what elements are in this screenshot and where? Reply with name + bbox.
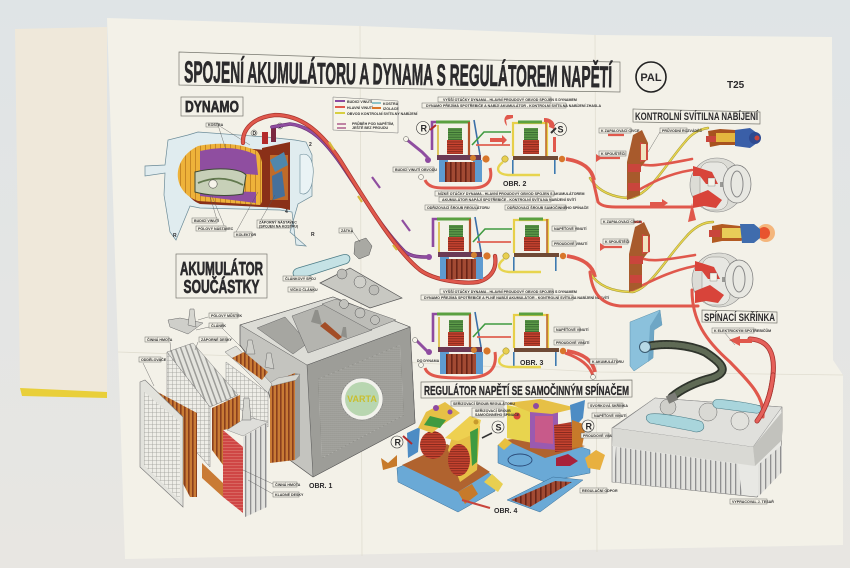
label: to electrical appliances: K ELEKTRICKÝM SPOTŘEBIČŮM <box>714 328 771 333</box>
dynamo callouts: (SPOJEN NA KOSTRU) <box>259 224 299 228</box>
heading: battery components: AKUMULÁTOR <box>180 258 263 279</box>
heading: dynamo: DYNAMO <box>185 99 239 116</box>
figure 2 regulator: BUDICÍ VINUTÍ OBVODU <box>395 167 437 172</box>
plate labels: KLADNÉ DESKY <box>275 492 304 497</box>
dynamo callouts: KOLEKTOR <box>236 233 257 237</box>
figure 4 regulator right: R <box>586 422 592 432</box>
figure 4 labels: SEŘIZOVACÍ ŠROUB REGULÁTORU <box>453 401 515 406</box>
figure 2 regulator: R <box>420 124 428 134</box>
figure 4 regulator right <box>482 399 605 482</box>
dynamo callouts: KOSTRA <box>208 123 224 127</box>
figure 4 caption: OBR. 4 <box>494 508 517 515</box>
upper lamp labels <box>599 128 703 156</box>
legend: HLAVNÍ VINUTÍ <box>347 105 374 110</box>
dynamo callouts: ZÁPORNÝ NÁSTAVEC <box>259 220 297 224</box>
car battery <box>612 398 782 497</box>
legend: BUDICÍ VINUTÍ <box>347 99 373 104</box>
lower ignition switch <box>692 253 753 307</box>
upper charging lamp <box>706 128 761 148</box>
plate labels: ČLÁNEK <box>211 323 226 328</box>
dynamo callouts <box>173 123 315 239</box>
figure 3 regulator: PROUDOVÉ VINUTÍ <box>556 340 590 345</box>
title <box>179 52 620 94</box>
figure 3 regulator: NAPĚŤOVÉ VINUTÍ <box>556 327 590 332</box>
lit charging lamp <box>709 224 775 243</box>
middle regulator <box>425 191 595 279</box>
lid labels <box>283 228 360 292</box>
heading: switch box <box>702 310 777 324</box>
braided earth cable <box>640 342 722 404</box>
upper lamp labels: K SPOUŠTĚČI <box>601 151 625 156</box>
legend: IZOLACE <box>383 107 399 111</box>
figure 4 labels: REGULAČNÍ ODPOR <box>582 488 618 493</box>
battery plates exploded <box>140 309 300 517</box>
legend: JEŠTĚ BEZ PROUDU <box>352 125 389 130</box>
lid labels: ČLÁNKOVÝ SPOJ <box>285 276 316 281</box>
figure 4 resistor <box>507 477 583 512</box>
figure 3 regulator: DO DYNAMA <box>417 359 440 363</box>
figure 1 caption: OBR. 1 <box>309 483 332 490</box>
lid labels: ZÁTKA <box>341 228 354 233</box>
plate labels: ZÁPORNÉ DESKY <box>201 337 233 342</box>
wires from dynamo <box>243 115 495 283</box>
dynamo callouts: PÓLOVÝ NÁSTAVEC <box>198 226 234 231</box>
middle regulator: NAPĚŤOVÉ VINUTÍ <box>554 226 588 231</box>
blue bracket <box>630 310 662 371</box>
figure 2 regulator: DYNAMO PŘEJÍMÁ SPOTŘEBIČE A NABÍJÍ AKUMULÁTOR - KONTROLNÍ SVÍTILNA NABÍJENÍ ZHASLA <box>426 103 602 108</box>
dynamo callouts: D <box>252 131 256 137</box>
figure 2 regulator: S <box>558 124 564 134</box>
figure 3 regulator: DYNAMO PŘEJÍMÁ SPOTŘEBIČE A PLNĚ NABÍJÍ AKUMULÁTOR - KONTROLNÍ SVÍTILNA NABÍJENÍ NESVÍTÍ <box>424 295 610 300</box>
figure 3 regulator <box>412 289 624 380</box>
red battery leads <box>730 362 773 421</box>
upper ignition switch <box>690 158 751 212</box>
figure 4 labels: SVORKOVÁ SKŘÍŇKA <box>590 403 628 408</box>
figure 2 regulator <box>393 97 602 188</box>
legend <box>333 97 418 133</box>
figure 4 labels: NAPĚŤOVÉ VINUTÍ <box>594 413 628 418</box>
figure 4 regulator left <box>381 402 503 512</box>
battery cutaway case: VARTA <box>347 394 377 404</box>
PAL logo: PAL <box>640 72 662 84</box>
lower lamp labels: K ZAPALOVACÍ CÍVCE <box>603 219 642 224</box>
right wiring <box>590 128 773 421</box>
plate labels <box>139 313 304 497</box>
battery cutaway case <box>240 297 415 477</box>
book cover behind the poster <box>15 27 107 398</box>
label: to electrical appliances <box>712 328 771 345</box>
PAL logo <box>636 62 666 92</box>
figure 3 regulator: OBR. 3 <box>520 360 543 367</box>
heading: battery components <box>176 254 267 298</box>
lower bracket <box>629 222 650 292</box>
dynamo callouts: D <box>278 124 282 130</box>
figure 4 regulator left: R <box>394 438 402 448</box>
legend: PRŮBĚH POD NAPĚTÍM, <box>352 121 394 126</box>
figure 4 labels <box>451 401 628 493</box>
middle regulator: PROUDOVÉ VINUTÍ <box>554 241 588 246</box>
dynamo callouts: 4 <box>285 209 288 215</box>
upper lamp labels: K ZAPALOVACÍ CÍVCE <box>601 128 640 133</box>
upper bracket <box>627 130 648 200</box>
figure 2 regulator: OBR. 2 <box>503 181 526 188</box>
dynamo callouts: R <box>173 233 177 239</box>
figure 4 labels: PROUDOVÉ VINUTÍ <box>583 433 617 438</box>
figure 3 regulator: K AKUMULÁTORU <box>592 359 624 364</box>
credit label: VYPRACOVAL J. TESAŘ <box>732 499 774 504</box>
cell lid, strap and cap <box>293 238 402 308</box>
figure 4 labels: SAMOČINNÉHO SPÍNAČE <box>475 412 520 417</box>
heading: charging lamp: KONTROLNÍ SVÍTILNA NABÍJENÍ <box>635 110 759 123</box>
upper lamp labels: PRŮVODNÍ ROZVÁDĚČ <box>662 128 703 133</box>
plate labels: PÓLOVÝ MŮSTEK <box>211 313 243 318</box>
heading: charging lamp <box>633 109 760 124</box>
figure 2 regulator: VYŠŠÍ OTÁČKY DYNAMA - HLAVNÍ PROUDOVÝ OBVOD SPOJEN S DYNAMEM <box>443 97 577 102</box>
dynamo callouts: R <box>311 232 315 238</box>
code T25: T25 <box>727 80 745 91</box>
lower lamp labels: K SPOUŠTĚČI <box>605 239 629 244</box>
legend: OBVOD KONTROLNÍ SVÍTILNY NABÍJENÍ <box>347 111 418 116</box>
dynamo callouts: 2 <box>309 142 312 148</box>
heading: regulator with automatic switch: REGULÁTOR NAPĚTÍ SE SAMOČINNÝM SPÍNAČEM <box>424 383 629 398</box>
dynamo callouts: BUDICÍ VINUTÍ <box>194 218 220 223</box>
plate labels: ODDĚLOVAČE <box>141 357 167 362</box>
lower lamp labels <box>601 219 642 244</box>
heading: switch box: SPÍNACÍ SKŘÍNKA <box>704 311 775 324</box>
figure 4 regulator right: S <box>496 422 502 432</box>
legend: KOSTRA <box>383 102 399 106</box>
middle regulator: ODŘIZOVACÍ ŠROUB SAMOČINNÉHO SPÍNAČE <box>507 205 589 210</box>
middle regulator: NÍZKÉ OTÁČKY DYNAMA - HLAVNÍ PROUDOVÝ OBVOD SPOJEN S AKUMULÁTOREM <box>438 191 584 196</box>
figure 4 labels: SEŘIZOVACÍ ŠROUB <box>475 408 511 413</box>
dynamo illustration <box>145 128 313 246</box>
figure 3 regulator: VYŠŠÍ OTÁČKY DYNAMA - HLAVNÍ PROUDOVÝ OBVOD SPOJEN S DYNAMEM <box>443 289 577 294</box>
plate labels: ČINNÁ HMOTA <box>147 337 173 342</box>
middle regulator: AKUMULÁTOR NAPÁJÍ SPOTŘEBIČE - KONTROLNÍ SVÍTILNA NABÍJENÍ SVÍTÍ <box>442 197 577 202</box>
heading: regulator with automatic switch <box>421 380 632 398</box>
middle regulator: ODŘIZOVACÍ ŠROUB REGULÁTORU <box>427 205 490 210</box>
lid labels: VÍČKO ČLÁNKU <box>290 287 318 292</box>
heading: battery components: SOUČÁSTKY <box>184 276 260 297</box>
plate labels: ČINNÁ HMOTA <box>275 482 301 487</box>
